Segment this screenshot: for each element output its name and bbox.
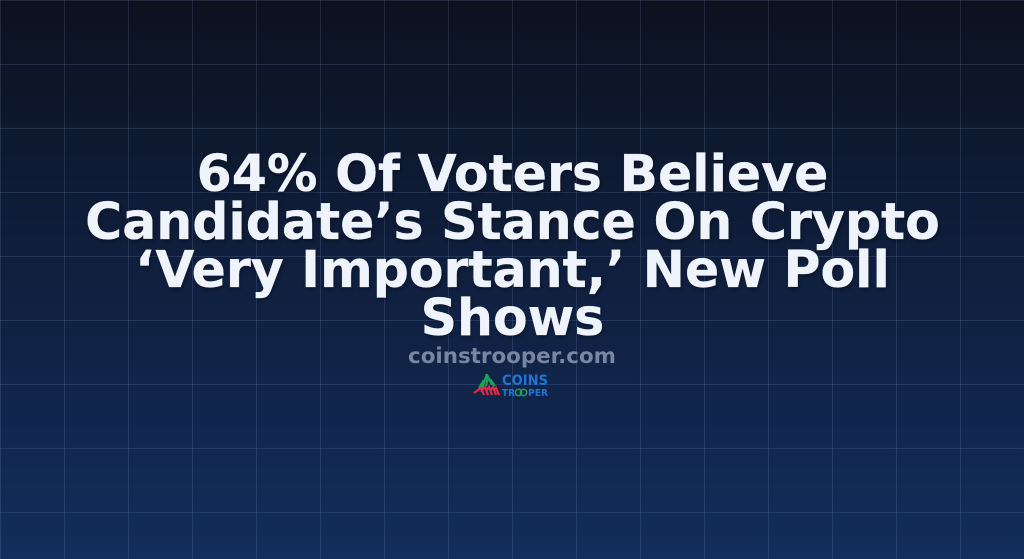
site url: coinstrooper.com [408,344,616,369]
title: Shows [421,288,604,347]
logo mark: green peaks [479,374,495,388]
logo wordmark: TROOPER: PER [528,388,549,399]
logo wordmark: TROOPER [502,388,549,399]
title: Candidate’s Stance On Crypto [85,192,940,251]
logo mark: red peaks [474,387,499,395]
title: 64% Of Voters Believe [197,144,828,203]
logo wordmark: TROOPER: TR [502,388,516,399]
title: ‘Very Important,’ New Poll [135,240,890,299]
icon: coinstrooper logo [473,373,549,399]
logo wordmark: COINS: COINS [502,373,548,389]
title [85,144,940,347]
